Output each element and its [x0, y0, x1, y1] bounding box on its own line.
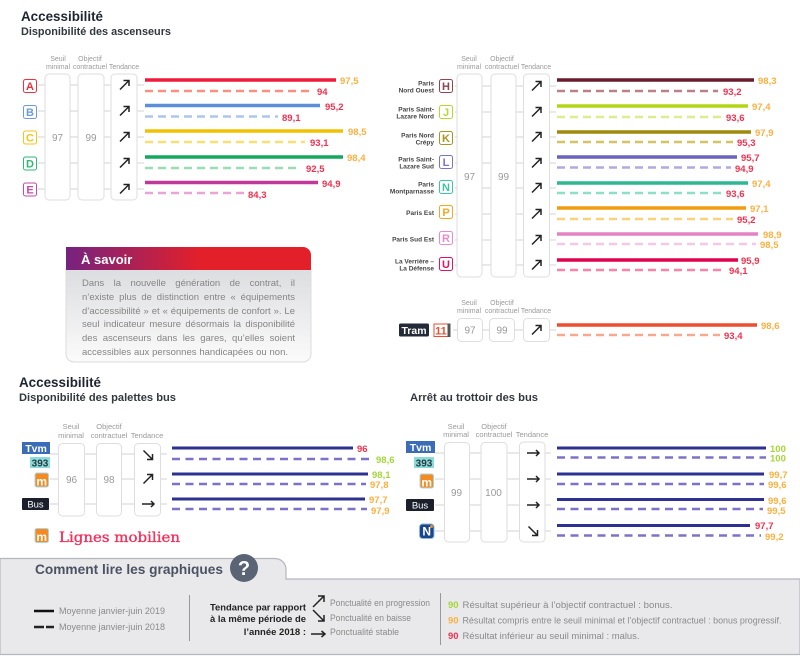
bars D: 98,4 [347, 153, 366, 164]
column headers: Tendance [521, 64, 551, 71]
row U: 94,1 [729, 266, 748, 277]
bars Tvm 393: 100 [770, 454, 786, 464]
note: lignes mobilien: Lignes mobilien [59, 530, 180, 546]
row K: Paris Nord [401, 132, 434, 140]
legend background [0, 558, 800, 654]
legend: line styles: Moyenne janvier-juin 2018 [59, 622, 165, 632]
box: tendance arrows [111, 74, 137, 200]
icon: Bus [406, 499, 434, 512]
bars E: 84,3 [248, 190, 266, 201]
callout header [66, 247, 311, 270]
row N: Montparnasse [390, 188, 434, 196]
row H: 93,2 [723, 87, 742, 98]
row U: La Verrière – [395, 258, 434, 266]
row J: 93,6 [726, 113, 744, 124]
icon: Tvm [406, 441, 435, 454]
legend: tendance text: Tendance par rapport [210, 602, 307, 614]
subtitle: Disponibilité des palettes bus: Disponibilité des palettes bus [19, 392, 176, 404]
bars D: 92,5 [306, 164, 325, 175]
icon: question mark: ? [238, 558, 250, 580]
icon: line 11: 11 [435, 326, 447, 338]
box: seuil minimal: 97 [52, 133, 63, 144]
row U [395, 256, 760, 277]
row L: Lazare Sud [399, 164, 434, 170]
box: tendance [524, 318, 550, 342]
callout body [66, 269, 311, 362]
row N: 97,4 [752, 179, 771, 190]
column headers: Seuil [461, 56, 477, 63]
bars A [145, 76, 359, 98]
callout text: Dans la nouvelle génération de contrat, il [82, 278, 295, 289]
icon: Tvm: Tvm [410, 442, 431, 454]
legend: tendance text: à la même période de [210, 614, 306, 625]
bars B [145, 102, 344, 124]
box: seuil minimal: 97 [464, 172, 475, 183]
column headers: minimal [58, 431, 84, 440]
badge E: E [26, 184, 34, 196]
legend heading: Comment lire les graphiques [35, 561, 223, 577]
icon: Noctilien: N [422, 524, 431, 538]
bars mobilien: 99,6 [768, 480, 786, 491]
row R: 98,9 [763, 230, 782, 241]
bars tram [557, 321, 780, 342]
bars A: 94 [317, 87, 328, 98]
callout text [82, 277, 298, 361]
badge B: B [26, 107, 34, 119]
row R [392, 230, 782, 251]
row U: La Défense [399, 266, 434, 272]
bars tram: 98,6 [761, 321, 780, 332]
panel: chart arrêt au trottoir [406, 422, 788, 543]
icon: Tram: Tram [401, 325, 427, 337]
row H: H [442, 81, 450, 93]
box: seuil minimal [45, 74, 70, 200]
row L [398, 153, 760, 175]
badge E [24, 183, 36, 196]
row P [406, 204, 769, 226]
box: seuil minimal: 96 [66, 475, 77, 486]
callout text: des ascenseurs dans les gares, qu’elles soient [82, 333, 295, 344]
icon: mobilien: m [421, 476, 432, 490]
column headers [46, 56, 139, 71]
bars mobilien: 99,7 [769, 470, 788, 481]
connectors [455, 86, 556, 265]
bars E [145, 179, 340, 201]
bars Noctilien: 99,2 [765, 532, 784, 543]
box: objectif contractuel: 98 [103, 475, 115, 486]
column headers: Objectif [96, 422, 123, 431]
row L: 95,7 [741, 153, 760, 164]
column headers: contractuel [91, 431, 128, 440]
bars Bus: 99,6 [768, 496, 786, 507]
badge C [24, 131, 36, 144]
bars Tvm 393 [172, 444, 394, 466]
bars Bus [557, 496, 786, 517]
row U: 95,9 [741, 256, 760, 267]
column headers: contractuel [485, 64, 520, 71]
icon: Bus: Bus [27, 500, 44, 510]
bars Tvm 393 [557, 444, 786, 464]
legend: results colour key: 90 [448, 631, 459, 642]
column headers: minimal [443, 430, 469, 439]
bars Bus: 97,7 [369, 495, 388, 506]
row L: Paris Saint- [398, 156, 434, 164]
column headers: Tendance [109, 64, 139, 71]
row R: Paris Sud Est [392, 236, 435, 244]
legend: tendance labels: Ponctualité en baisse [330, 613, 411, 623]
badge C: C [26, 132, 34, 144]
legend: tendance text [210, 602, 307, 638]
icon: question mark [230, 554, 258, 582]
box: seuil minimal [444, 442, 470, 542]
column headers: minimal [457, 308, 481, 315]
box: seuil minimal [58, 444, 84, 516]
connectors [453, 329, 556, 331]
box: tendance arrows [524, 74, 550, 277]
connectors [50, 454, 167, 504]
legend: line styles: Moyenne janvier-juin 2019 [59, 606, 165, 616]
column headers: Seuil [461, 300, 477, 307]
bars tram: 93,4 [724, 331, 743, 342]
row K: K [442, 133, 450, 145]
row H: Paris [418, 80, 434, 88]
box: objectif contractuel [78, 74, 104, 200]
row P: 97,1 [750, 204, 769, 215]
badge D [24, 157, 36, 170]
callout text: d’accessibilité » et « équipements de confort ». Le [82, 306, 295, 317]
box: tendance arrows [134, 444, 160, 516]
bars mobilien [557, 470, 788, 491]
row J: Paris Saint- [398, 106, 434, 114]
bars Bus [172, 495, 390, 517]
row R: 98,5 [760, 240, 779, 251]
bars Tvm 393: 96 [357, 444, 368, 455]
row N: 93,6 [726, 189, 744, 200]
bars Tvm 393: 98,6 [376, 455, 394, 466]
column headers: Objectif [490, 300, 514, 307]
subtitle: Disponibilité des ascenseurs: Disponibilité des ascenseurs [21, 26, 171, 38]
legend: tendance labels: Ponctualité en progression [330, 598, 430, 608]
title: Accessibilité palettes: Accessibilité [19, 375, 101, 390]
connectors [435, 453, 551, 531]
legend: results colour key: 90 [448, 600, 459, 611]
column headers: minimal [46, 64, 70, 71]
row L: L [443, 157, 450, 169]
box: objectif contractuel: 99 [498, 172, 509, 183]
icon: 393: 393 [32, 458, 49, 470]
connectors [38, 85, 144, 189]
bars mobilien: 97,8 [370, 480, 388, 491]
row N [390, 179, 771, 200]
box: seuil minimal: 99 [451, 488, 462, 499]
bars B: 95,2 [325, 102, 344, 113]
bars A: 97,5 [340, 76, 359, 87]
column headers: contractuel [485, 308, 520, 315]
panel: chart palettes bus [22, 422, 394, 546]
row N: N [442, 182, 450, 194]
legend: results colour key: 90 [448, 616, 459, 626]
subtitle: Arrêt au trottoir des bus: Arrêt au trottoir des bus [410, 392, 538, 404]
box: objectif contractuel [490, 318, 514, 342]
column headers [457, 300, 551, 315]
icon: Bus [22, 498, 49, 510]
row N: Paris [418, 182, 434, 188]
panel: chart RER ascenseurs [24, 56, 367, 201]
legend: results colour key: Résultat inférieur au seuil minimal : malus. [462, 631, 640, 641]
box: objectif contractuel [491, 74, 516, 277]
callout text: accessibles aux personnes handicapées ou non. [82, 347, 288, 358]
icon: Tvm: Tvm [25, 443, 47, 455]
legend: tendance labels [330, 598, 430, 637]
row J: Lazare Nord [396, 114, 434, 120]
column headers: Seuil [63, 422, 80, 431]
row U: U [442, 259, 450, 271]
legend: results colour key: Résultat supérieur à l’objectif contractuel : bonus. [462, 600, 672, 610]
row H: 98,3 [758, 76, 776, 87]
bars Bus: 99,5 [767, 506, 786, 517]
row K: Crépy [416, 140, 434, 146]
bars Bus: 97,9 [371, 506, 390, 517]
panel: chart Transilien ascenseurs [390, 56, 782, 277]
column headers: minimal [457, 64, 481, 71]
row P: 95,2 [737, 215, 756, 226]
box: seuil minimal: 97 [464, 326, 476, 336]
box: objectif contractuel [481, 442, 507, 542]
bars D [145, 153, 366, 175]
icon: line 11 [434, 324, 450, 338]
divider [188, 595, 190, 641]
badge A: A [26, 81, 34, 93]
badge D: D [26, 158, 34, 170]
panel: Comment lire les graphiques [0, 554, 800, 654]
divider [440, 593, 442, 645]
box: objectif contractuel: 99 [496, 326, 508, 336]
legend: results colour key [448, 600, 782, 642]
legend: line styles [34, 606, 165, 632]
column headers: contractuel [73, 64, 108, 71]
bars E: 94,9 [322, 179, 340, 190]
row H [399, 76, 776, 98]
bars mobilien: 98,1 [372, 470, 391, 481]
column headers: Objectif [490, 56, 514, 63]
row P: P [442, 207, 450, 219]
legend: tendance arrows [311, 596, 325, 637]
bars B: 89,1 [282, 113, 301, 124]
box: objectif contractuel: 100 [485, 488, 502, 499]
bars C [145, 127, 367, 149]
legend: results colour key: Résultat compris entre le seuil minimal et l’objectif contractuel : bonus progressif. [462, 616, 782, 626]
box: tendance arrows [520, 442, 545, 542]
bars Noctilien [557, 521, 784, 543]
callout text: n’existe plus de distinction entre « équipements [82, 292, 295, 303]
legend: tendance text: l’année 2018 : [244, 627, 306, 638]
column headers: Tendance [521, 308, 551, 315]
panel: Tram chart [399, 300, 780, 342]
icon: mobilien: m [36, 474, 47, 488]
note: lignes mobilien: m [36, 530, 47, 544]
column headers [58, 422, 163, 440]
callout text: seul indicateur mesure désormais la disponibilité [82, 319, 295, 330]
column headers: Tendance [131, 431, 163, 440]
column headers: Objectif [481, 422, 508, 431]
callout header: À savoir [81, 252, 132, 267]
bars mobilien [172, 470, 391, 491]
box: objectif contractuel [96, 444, 122, 516]
column headers: Seuil [50, 56, 66, 63]
title: Accessibilité ascenseurs: Accessibilité [21, 9, 103, 24]
column headers: Objectif [78, 56, 102, 63]
badge A [24, 80, 36, 93]
column headers: Tendance [516, 430, 548, 439]
row K: 97,9 [755, 128, 774, 139]
row L: 94,9 [735, 164, 754, 175]
row J [396, 102, 771, 124]
row R: R [442, 233, 450, 245]
icon: 393: 393 [416, 458, 433, 470]
bars C: 98,5 [348, 127, 367, 138]
row K: 95,3 [737, 138, 756, 149]
icon: Bus: Bus [412, 500, 428, 512]
row J: 97,4 [752, 102, 771, 113]
bars Tvm 393: 100 [770, 444, 786, 455]
column headers [457, 56, 551, 71]
column headers [443, 422, 548, 439]
column headers: contractuel [476, 430, 513, 439]
row K [401, 128, 774, 149]
bars Noctilien: 97,7 [755, 521, 774, 532]
row J: J [443, 107, 449, 119]
column headers: Seuil [448, 422, 465, 431]
bars C: 93,1 [310, 138, 329, 149]
box: seuil minimal [457, 74, 482, 277]
box: seuil minimal [458, 318, 482, 342]
legend: tendance labels: Ponctualité stable [330, 627, 399, 637]
row H: Nord Ouest [399, 88, 435, 94]
box: objectif contractuel: 99 [85, 133, 97, 144]
row P: Paris Est [406, 210, 435, 217]
panel: À savoir callout [66, 247, 311, 362]
badge B [24, 106, 36, 119]
icon: Noctilien [420, 524, 434, 538]
